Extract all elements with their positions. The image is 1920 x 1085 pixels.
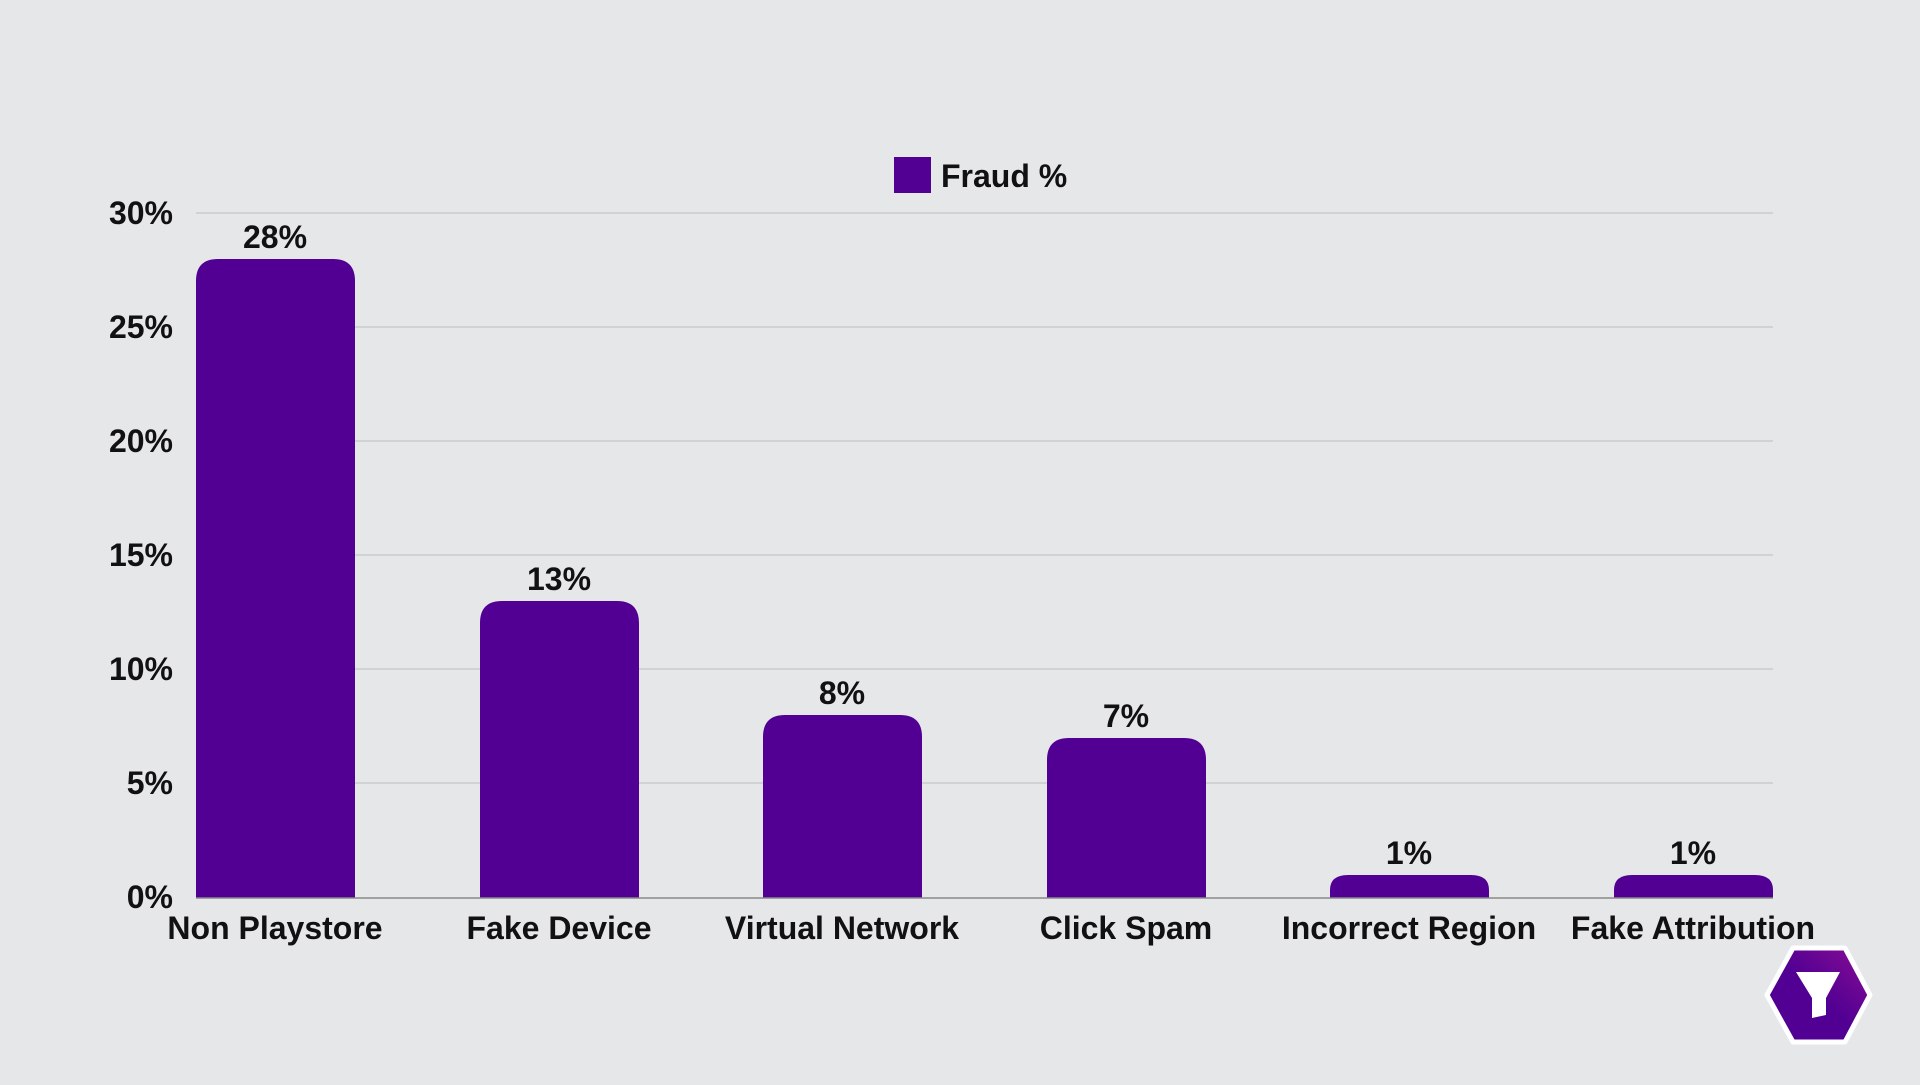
value labels: 13% xyxy=(527,561,591,597)
legend: Fraud % xyxy=(941,158,1067,194)
value labels: 8% xyxy=(819,675,865,711)
value labels: 7% xyxy=(1103,698,1149,734)
y axis labels: 30% xyxy=(109,195,173,231)
y axis labels: 25% xyxy=(109,309,173,345)
y axis labels: 0% xyxy=(127,879,173,915)
category labels: Incorrect Region xyxy=(1282,910,1536,946)
category labels: Virtual Network xyxy=(725,910,959,946)
category labels: Click Spam xyxy=(1040,910,1212,946)
category labels: Non Playstore xyxy=(167,910,383,946)
value labels: 1% xyxy=(1386,835,1432,871)
logo xyxy=(1767,948,1870,1042)
value labels: 1% xyxy=(1670,835,1716,871)
y axis labels xyxy=(109,195,173,915)
category labels: Fake Device xyxy=(466,910,652,946)
value labels xyxy=(243,219,1716,871)
value labels: 28% xyxy=(243,219,307,255)
y axis labels: 10% xyxy=(109,651,173,687)
y axis labels: 20% xyxy=(109,423,173,459)
bars xyxy=(196,259,1773,898)
category labels: Fake Attribution xyxy=(1571,910,1815,946)
category labels xyxy=(167,910,1815,946)
y axis labels: 5% xyxy=(127,765,173,801)
y axis labels: 15% xyxy=(109,537,173,573)
